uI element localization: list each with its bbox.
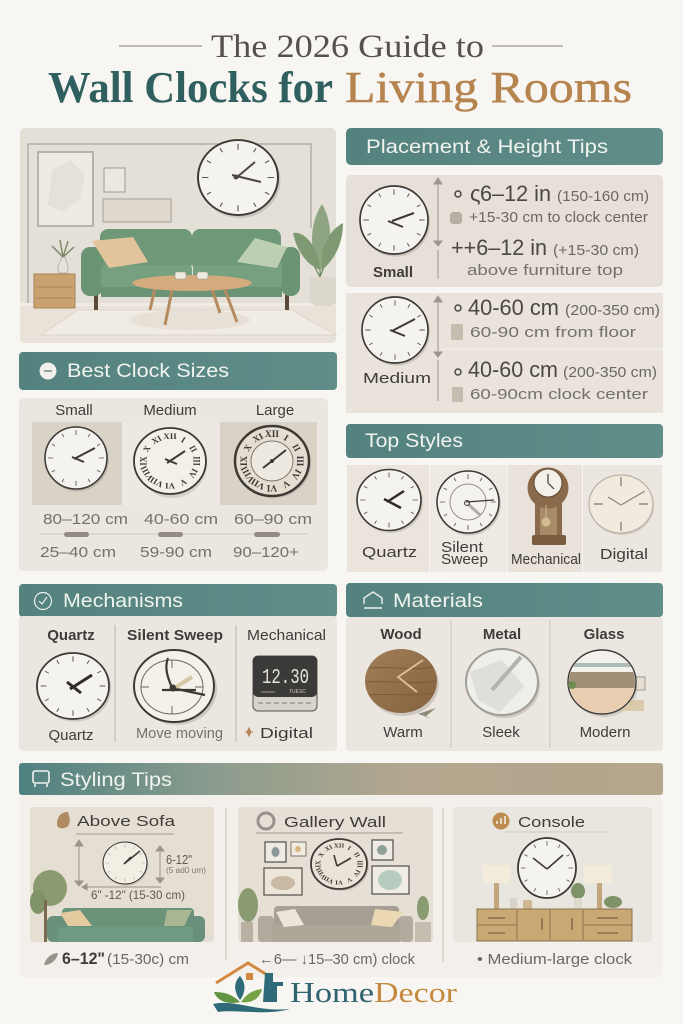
panel: placement medium: 60-90cm clock center xyxy=(470,386,648,403)
panel: materials xyxy=(346,617,663,751)
heading: top styles xyxy=(346,424,663,458)
lamps xyxy=(483,865,622,909)
quartz style clock xyxy=(357,470,423,533)
card: gallery wall: Gallery Wall xyxy=(284,814,386,831)
panel: materials: Metal xyxy=(483,626,521,643)
grey sofa xyxy=(258,906,413,942)
panel: mechanisms: Digital xyxy=(260,725,313,742)
large ornate clock xyxy=(235,426,311,498)
panel: best clock sizes: 59-90 cm xyxy=(140,544,212,561)
heading: materials: Materials xyxy=(393,591,483,612)
title: Wall Clocks for xyxy=(48,63,333,112)
hero wall clock xyxy=(198,140,280,218)
panel: placement medium: (200-350 cm) xyxy=(563,364,657,381)
panel: placement small: Small xyxy=(373,264,413,281)
panel: mechanisms: Move moving xyxy=(136,725,223,742)
heading: top styles: Top Styles xyxy=(365,431,463,452)
panel: placement small: 6–12 in xyxy=(480,181,551,206)
wood clock xyxy=(365,649,439,718)
floor plant xyxy=(293,204,343,306)
panel: top styles: Silent xyxy=(441,539,484,556)
heading: best clock sizes xyxy=(19,352,337,390)
sofa xyxy=(81,229,300,310)
panel: placement small: (150-160 cm) xyxy=(557,188,649,205)
tree xyxy=(30,870,67,942)
panel: mechanisms: Quartz xyxy=(48,727,94,744)
heading: styling tips xyxy=(19,763,663,795)
panel: placement small xyxy=(346,175,663,287)
title: Living Rooms xyxy=(345,63,632,112)
coffee table xyxy=(132,272,252,325)
heading: materials xyxy=(346,583,663,617)
title: The 2026 Guide to xyxy=(211,29,484,65)
panel: materials: Sleek xyxy=(482,724,520,741)
digital style clock xyxy=(589,475,654,535)
panel: materials: Modern xyxy=(580,724,630,741)
panel: best clock sizes: 60–90 cm xyxy=(234,511,312,528)
console cabinet xyxy=(477,909,632,941)
logo: HomeDecor: Home xyxy=(290,977,374,1009)
footer notes: 6–12" xyxy=(62,949,105,968)
panel: top styles: Mechanical xyxy=(511,551,581,568)
panel: best clock sizes: 25–40 cm xyxy=(40,544,116,561)
panel: styling tips xyxy=(20,795,662,977)
panel: best clock sizes: Large xyxy=(256,402,294,419)
panel: top styles: Sweep xyxy=(441,551,488,568)
digital clock xyxy=(253,656,317,711)
digital clock: TUESC xyxy=(289,689,306,695)
hero living room illustration xyxy=(20,128,343,343)
panel: materials: Wood xyxy=(380,626,422,643)
glass clock xyxy=(568,650,645,717)
panel: best clock sizes xyxy=(19,398,328,571)
logo house mark xyxy=(213,963,290,1012)
rug xyxy=(41,310,336,335)
digital clock: 12.30 xyxy=(262,667,309,690)
plants xyxy=(238,888,431,942)
logo: HomeDecor: Decor xyxy=(374,977,457,1009)
footer notes: ←6— ↓15–30 cm) clock xyxy=(259,951,415,968)
medium roman clock xyxy=(134,428,207,498)
panel: top styles: Digital xyxy=(600,546,648,563)
card: console xyxy=(453,807,652,942)
panel: placement small: ς xyxy=(470,181,481,206)
panel: placement medium: (200-350 cm) xyxy=(565,302,660,319)
heading: mechanisms: Mechanisms xyxy=(63,591,183,612)
footer notes: • Medium-large clock xyxy=(477,951,633,968)
heading: placement and height tips xyxy=(346,128,663,165)
title xyxy=(48,29,632,112)
height arrow xyxy=(434,296,442,401)
heading: styling tips: Styling Tips xyxy=(60,770,172,791)
panel: mechanisms: Mechanical xyxy=(247,627,326,644)
panel: placement medium xyxy=(346,293,663,413)
panel: placement small: +15-30 cm to clock center xyxy=(469,209,648,226)
silent sweep clock xyxy=(134,650,217,725)
panel: mechanisms: Quartz xyxy=(47,627,95,644)
mechanical pendulum clock xyxy=(528,468,568,545)
heading: mechanisms xyxy=(19,584,337,617)
panel: placement medium: Medium xyxy=(363,370,431,387)
panel: top styles: Quartz xyxy=(362,544,417,561)
heading: placement and height tips: Placement & Height Tips xyxy=(366,137,608,158)
panel: best clock sizes: 40-60 cm xyxy=(144,511,218,528)
silent sweep style clock xyxy=(437,471,501,535)
height arrow xyxy=(434,178,442,279)
small clock xyxy=(45,427,109,491)
clock with arrows: (5 ad0 um) xyxy=(166,866,206,875)
panel: placement medium: 40-60 cm xyxy=(468,357,558,382)
nightstand with vase xyxy=(34,240,75,308)
card: console: Console xyxy=(518,814,585,831)
panel: best clock sizes: Medium xyxy=(143,402,197,419)
panel: top styles xyxy=(347,465,662,572)
console clock xyxy=(518,838,576,898)
framed art xyxy=(264,840,409,895)
panel: best clock sizes: 90–120+ xyxy=(233,544,299,561)
small clock xyxy=(360,186,430,257)
green sofa xyxy=(47,908,205,942)
panel: mechanisms xyxy=(19,616,337,751)
clock with arrows xyxy=(75,840,206,902)
medium clock xyxy=(362,297,430,366)
heading: best clock sizes: Best Clock Sizes xyxy=(67,361,229,382)
clock with arrows: 6" -12" (15-30 cm) xyxy=(91,888,185,902)
footer notes: (15-30c) cm xyxy=(107,951,189,968)
panel: placement small: above furniture top xyxy=(467,262,623,279)
panel: materials: Glass xyxy=(584,626,624,643)
card: above sofa xyxy=(30,807,214,942)
hero wall art xyxy=(38,152,171,226)
panel: placement medium: 60-90 cm from floor xyxy=(470,324,636,341)
gallery clock xyxy=(311,839,369,891)
panel: mechanisms: Silent Sweep xyxy=(127,627,223,644)
metal clock xyxy=(466,649,540,718)
panel: best clock sizes: Small xyxy=(55,402,93,419)
panel: placement small: ++6–12 in xyxy=(451,235,547,260)
logo: HomeDecor xyxy=(213,963,457,1012)
footer notes xyxy=(44,949,633,968)
panel: placement medium: 40-60 cm xyxy=(468,295,559,320)
card: above sofa: Above Sofa xyxy=(77,813,176,830)
card: gallery wall xyxy=(238,807,433,942)
panel: materials: Warm xyxy=(383,724,423,741)
panel: placement small: (+15-30 cm) xyxy=(553,242,639,259)
clock with arrows: 6-12" xyxy=(166,852,192,867)
quartz clock xyxy=(37,653,111,722)
panel: best clock sizes: 80–120 cm xyxy=(43,511,128,528)
